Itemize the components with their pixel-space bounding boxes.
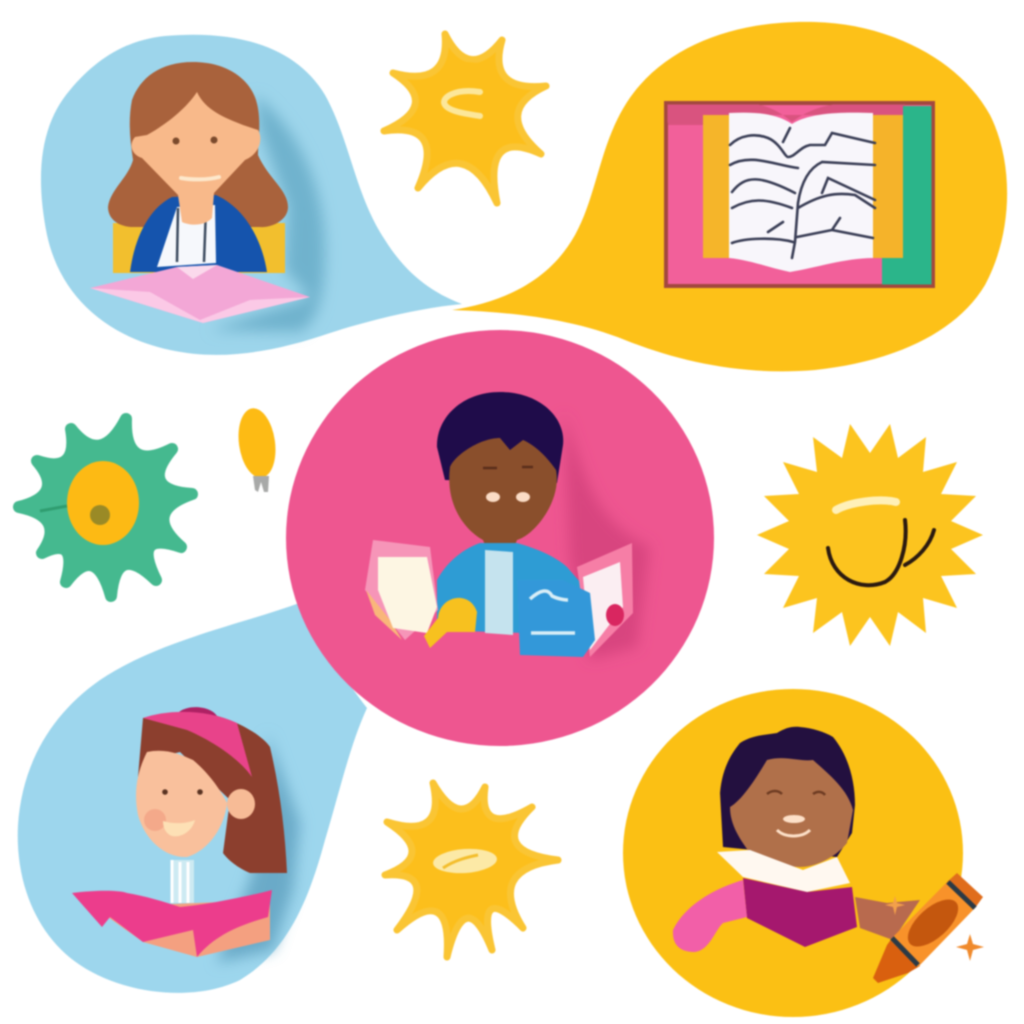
sun body [41,443,165,567]
sun rays [384,34,546,203]
book frame outline [666,103,933,286]
pink book edges [90,288,310,323]
book peach pages [108,900,270,957]
white stripes [172,860,188,903]
panel: top-left blue bubble [41,35,462,355]
smile [163,820,195,836]
yellow food blob [424,598,477,648]
bulb base [253,476,269,492]
headband [143,712,252,777]
panel: bottom-right yellow circle [623,689,963,1017]
crayon tip [873,938,920,983]
right book [577,543,633,657]
sun body [418,813,508,903]
panel: centre pink circle [286,330,714,746]
sun rays [19,419,192,596]
white collar [717,850,850,892]
shadow [217,733,300,963]
orange pages [873,115,903,258]
crayon oval label [900,891,966,955]
text lines [730,128,875,258]
figure: girl bottom-left [72,707,300,963]
pink book [72,890,272,957]
magenta book [743,878,857,947]
smile [181,177,219,179]
drawn smile [828,520,934,585]
hair [108,62,288,227]
eyes [162,789,203,795]
eyes [767,791,825,795]
icon: crayon [873,873,983,983]
mouth dot [90,505,110,525]
sun highlight [444,91,480,116]
brows [483,467,533,468]
pink book centre [177,265,217,279]
blue book [517,580,595,657]
icon: large sparkle [956,934,984,961]
yellow centre [67,461,139,545]
face [131,92,260,225]
icon: green sun [19,419,192,596]
white shirt [485,550,513,635]
highlight crease [443,855,478,868]
icon: small sparkle [885,896,905,915]
hair [437,392,563,483]
pink sleeve [673,880,747,952]
dark line [40,506,67,511]
panel: bottom-left blue bubble [18,602,367,993]
sun body [422,62,512,152]
green pages [882,106,933,286]
icon: light bulb [234,406,280,492]
book cover [666,103,933,286]
blue jacket [130,195,267,272]
arm [855,897,920,940]
headband crown [177,707,217,716]
sun rays [385,783,558,957]
ear [227,789,255,819]
lanyard [177,208,206,262]
hair [720,727,855,857]
yellow pages [703,115,730,258]
crayon stripes [892,882,975,965]
crayon cap [947,873,983,908]
hair [138,712,287,873]
white book pages [729,113,873,272]
crayon body [890,882,975,967]
illustration: open book top-right [665,103,933,286]
figure: boy centre [365,392,650,660]
right book page [583,562,623,650]
white mark on blue book [530,591,575,633]
shadow behind girl [210,95,325,332]
figure: girl top-left [90,62,325,332]
pink book [90,265,310,323]
eyes [486,492,530,502]
icon: bottom sun [385,783,558,957]
sun highlight [432,847,498,875]
blush [144,809,166,831]
face [136,751,227,857]
chair [113,223,285,273]
orange strip [366,590,402,640]
shadow [563,413,650,660]
left book page [378,557,437,633]
nose [783,815,805,823]
right book dot [606,604,624,626]
face [730,758,853,867]
highlight [836,500,896,510]
figure: girl bottom-right [673,727,920,952]
bulb glass [234,406,280,480]
left book [365,540,438,640]
icon: right sun [757,424,983,646]
white shirt [157,205,216,267]
panel: top-right yellow bubble [452,22,1007,371]
star body [757,424,983,646]
icon: top sun [384,34,546,203]
face [449,438,557,552]
eyes [172,136,218,144]
smile [777,830,810,836]
notch in top band [665,103,905,125]
blue jacket [437,543,580,635]
neck stripes [172,860,194,903]
